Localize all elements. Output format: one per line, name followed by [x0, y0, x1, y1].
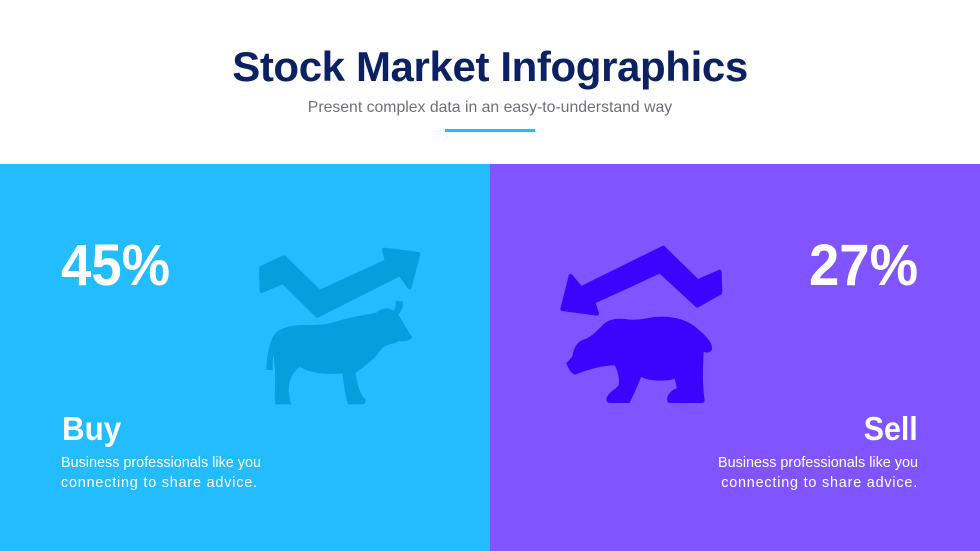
- sell description: Business professionals like you: [718, 455, 918, 471]
- sell percentage: 27%: [809, 233, 918, 298]
- icon: bull with rising arrow: [259, 248, 420, 404]
- falling arrow: [562, 248, 720, 314]
- accent underline: [445, 129, 535, 132]
- subtitle: Present complex data in an easy-to-understand way: [308, 99, 672, 116]
- title: Stock Market Infographics: [232, 43, 748, 90]
- panel: sell: [490, 164, 980, 551]
- panel: buy: [0, 164, 490, 551]
- buy description: [61, 455, 261, 490]
- rising arrow: [261, 250, 418, 316]
- buy description: Business professionals like you: [61, 455, 261, 471]
- sell heading: Sell: [864, 410, 918, 447]
- buy percentage: 45%: [61, 233, 170, 298]
- buy description: connecting to share advice.: [61, 474, 258, 490]
- buy heading: Buy: [62, 410, 121, 447]
- bull: [267, 301, 412, 404]
- sell description: [718, 455, 918, 490]
- icon: bear with falling arrow: [560, 246, 722, 403]
- bear: [567, 317, 712, 403]
- sell description: connecting to share advice.: [721, 474, 918, 490]
